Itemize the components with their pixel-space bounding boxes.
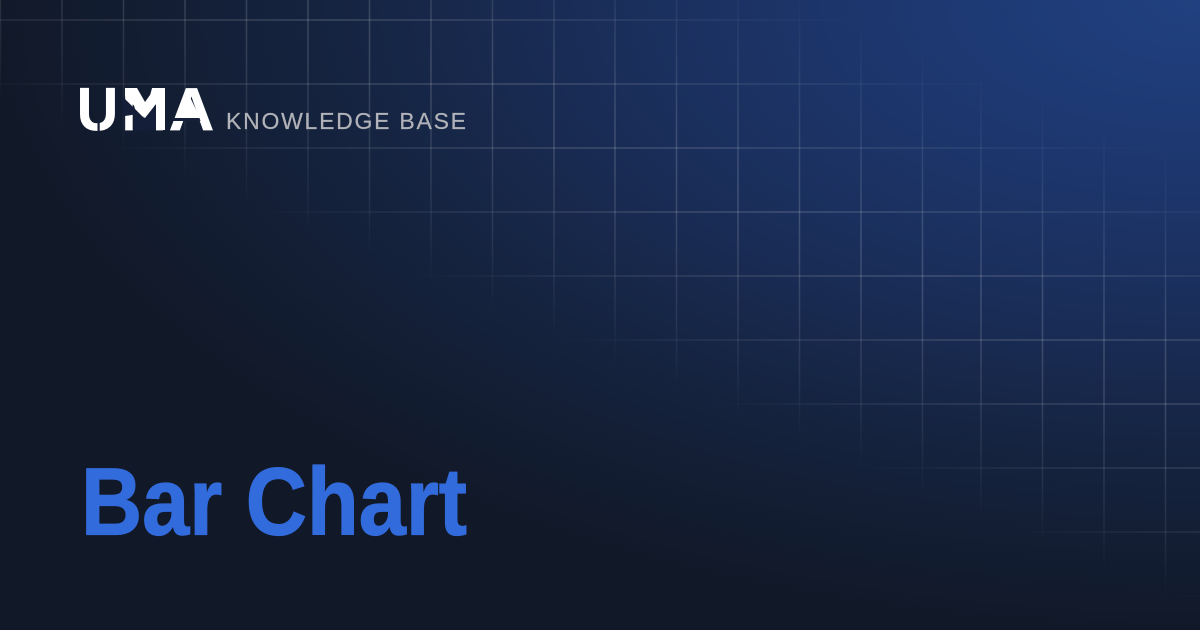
logo tagline: KNOWLEDGE BASE: KNOWLEDGE BASE [226, 108, 466, 134]
logo wordmark: UMA: U [77, 76, 118, 143]
logo wordmark: UMA [77, 76, 214, 143]
logo wordmark: UMA: M [122, 76, 166, 143]
logo wordmark: UMA: A [169, 76, 214, 143]
title: Bar Chart: Bar Chart [81, 448, 467, 556]
